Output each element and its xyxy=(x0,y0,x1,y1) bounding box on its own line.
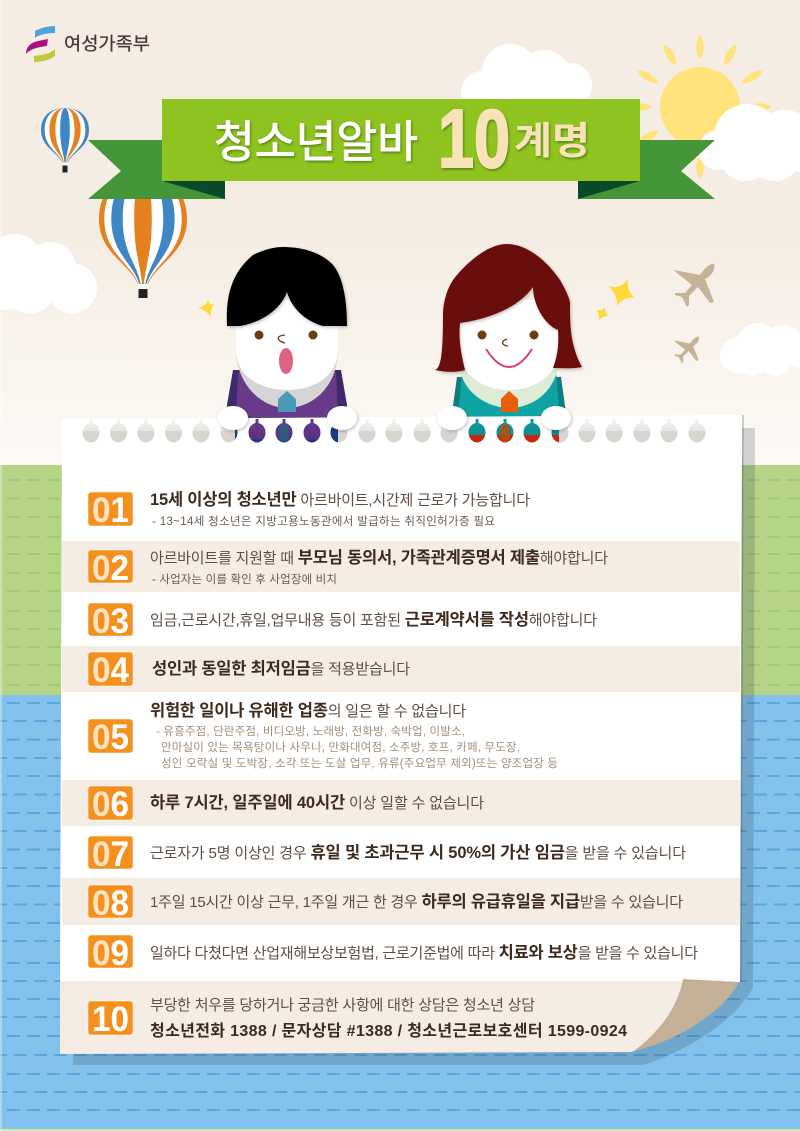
icon: sun xyxy=(628,35,772,179)
row 02 xyxy=(62,541,740,592)
cloud: top center xyxy=(461,44,592,113)
badge 07: 07 xyxy=(92,835,129,874)
punched holes xyxy=(82,419,706,442)
row 01 text: - 13~14세 청소년은 지방고용노동관에서 발급하는 취직인허가증 필요 xyxy=(152,514,495,528)
row 10 text xyxy=(150,997,627,1040)
badge 01: 01 xyxy=(92,491,129,530)
row 05 text: 성인 오락실 및 도박장, 소각 또는 도살 업무, 유류(주요업무 제외)또는 양조업장 등 xyxy=(161,757,558,770)
background sky xyxy=(0,0,800,465)
sparkle: left of boy xyxy=(198,299,215,317)
background grass band xyxy=(0,465,800,695)
row 06 text: 하루 7시간, 일주일에 40시간 이상 일할 수 없습니다 xyxy=(150,793,484,812)
badge 05: 05 xyxy=(92,718,129,757)
row 05 text xyxy=(150,701,558,770)
row 10 with page curl xyxy=(60,979,739,1054)
row 05 text: 위험한 일이나 유해한 업종의 일은 할 수 없습니다 xyxy=(150,701,466,720)
row 07 xyxy=(88,835,686,874)
row 10 text: 부당한 처우를 당하거나 궁금한 사항에 대한 상담은 청소년 상담 xyxy=(150,997,535,1014)
logo wordmark: 여성가족부 xyxy=(64,34,150,54)
badge 03: 03 xyxy=(92,602,129,641)
paper bottom section xyxy=(60,981,683,1054)
row 05 text: - 유흥주점, 단란주점, 비디오방, 노래방, 전화방, 숙박업, 이발소, xyxy=(156,724,465,738)
girl hands xyxy=(437,406,571,430)
badge 06: 06 xyxy=(92,785,129,824)
character: girl xyxy=(435,244,582,420)
cloud: lower right xyxy=(720,323,800,376)
sparkle: small right xyxy=(596,307,608,320)
title text: 청소년알바 xyxy=(214,118,418,167)
boy hands xyxy=(218,406,357,430)
row 08 xyxy=(62,878,740,925)
row 10 text: 청소년전화 1388 / 문자상담 #1388 / 청소년근로보호센터 1599-0924 xyxy=(150,1022,627,1040)
row 02 text: 아르바이트를 지원할 때 부모님 동의서, 가족관계증명서 제출해야합니다 xyxy=(150,548,608,567)
row 01 text: 15세 이상의 청소년만 아르바이트,시간제 근로가 가능합니다 xyxy=(150,490,530,509)
icon: small airplane xyxy=(674,337,699,363)
title text: 계명 xyxy=(514,121,590,163)
row 05 text: 안마실이 있는 목욕탕이나 사우나, 만화대여점, 소주방, 호프, 카페, 무도장, xyxy=(161,741,520,754)
row 07 text: 근로자가 5명 이상인 경우 휴일 및 초과근무 시 50%의 가산 임금을 받을 수 있습니다 xyxy=(150,843,686,862)
cloud: right of sun xyxy=(698,104,800,181)
sparkle: large right xyxy=(608,279,635,306)
background water band xyxy=(0,695,800,1131)
row 06 xyxy=(62,780,740,826)
badge 10: 10 xyxy=(92,1000,129,1039)
badge 08: 08 xyxy=(92,884,129,923)
paper shadow xyxy=(73,428,755,1065)
badge 02: 02 xyxy=(92,549,129,588)
row 04 text: 성인과 동일한 최저임금을 적용받습니다 xyxy=(152,659,410,678)
cloud: left xyxy=(0,234,97,314)
page curl flap xyxy=(634,979,739,1051)
title text xyxy=(214,92,590,185)
row 08 text: 1주일 15시간 이상 근무, 1주일 개근 한 경우 하루의 유급휴일을 지급받을 수 있습니다 xyxy=(150,892,683,911)
row 03 text: 임금,근로시간,휴일,업무내용 등이 포함된 근로계약서를 작성해야합니다 xyxy=(150,610,597,629)
note paper xyxy=(60,415,743,1054)
icon: large balloon xyxy=(99,175,187,298)
banner panel xyxy=(162,99,640,181)
row 01 xyxy=(88,490,530,530)
title banner xyxy=(88,92,715,199)
title text: 10 xyxy=(438,92,510,185)
badge 09: 09 xyxy=(92,934,129,973)
ribbon: right tail xyxy=(578,140,715,199)
row 01 text xyxy=(150,490,530,528)
icon: large airplane xyxy=(674,264,714,307)
row 05 xyxy=(88,701,558,770)
row 09 text: 일하다 다쳤다면 산업재해보상보험법, 근로기준법에 따라 치료와 보상을 받을 수 있습니다 xyxy=(150,943,698,962)
badge 04: 04 xyxy=(92,651,130,690)
character: boy xyxy=(227,247,347,420)
logo: ministry xyxy=(26,26,150,62)
icon: small balloon xyxy=(41,108,89,172)
row 09 xyxy=(88,934,698,973)
row 02 text: - 사업자는 이를 확인 후 사업장에 비치 xyxy=(152,573,337,586)
row 04 xyxy=(62,646,740,692)
ribbon: left tail xyxy=(88,140,225,199)
row 03 xyxy=(88,602,597,641)
row 02 text xyxy=(150,548,608,586)
icon: ministry logo xyxy=(26,26,55,62)
